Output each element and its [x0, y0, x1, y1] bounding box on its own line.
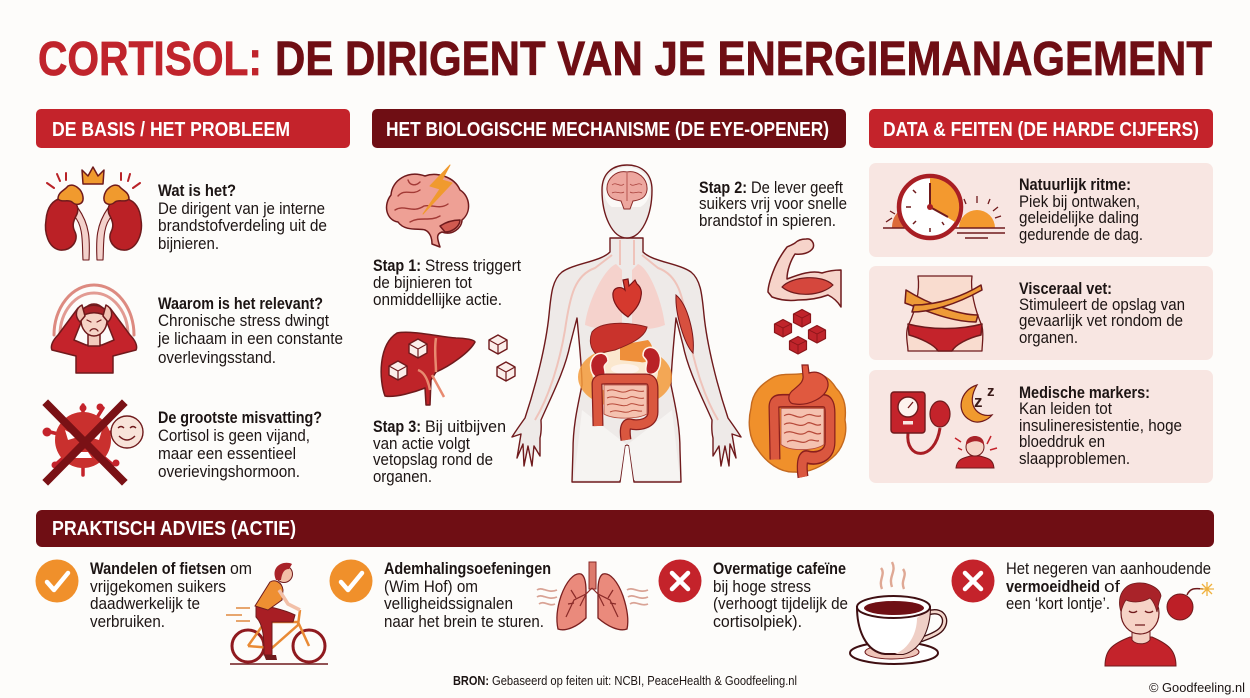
- icon: red cross: [658, 560, 702, 602]
- text: natuurlijk ritme: gedurende de dag.: [1019, 225, 1143, 244]
- icon: orange check: [330, 560, 372, 602]
- text: wandelen: Wandelen of fietsen: [90, 559, 226, 578]
- icon: tired person and bomb: [1105, 582, 1214, 666]
- text: waarom is het relevant: Chronische stress dwingt: [158, 311, 329, 330]
- icon: clock and sun: [883, 176, 1005, 238]
- text: medische markers: Medische markers:: [1019, 383, 1150, 402]
- text: ademhaling: [384, 559, 551, 631]
- advice: vermoeidheid negeren: [952, 559, 1214, 666]
- text: wat is het: bijnieren.: [158, 234, 219, 253]
- heading: de basis / het probleem: [36, 109, 350, 148]
- text: natuurlijk ritme: Natuurlijk ritme:: [1019, 175, 1131, 194]
- text: vermoeidheid: een ‘kort lontje’.: [1006, 594, 1110, 613]
- text: cafeine: cortisolpiek).: [713, 612, 802, 631]
- text: stap 3: vetopslag rond de: [373, 450, 493, 469]
- text: de grootste misvatting: [158, 408, 322, 481]
- heading: het biologische mechanisme: [372, 109, 846, 148]
- icon: waist with measuring tape: [905, 276, 983, 351]
- card: visceraal vet: [869, 266, 1213, 360]
- text: waarom is het relevant: overlevingsstand.: [158, 348, 276, 367]
- panel: de basis: [42, 167, 343, 481]
- text: de grootste misvatting: De grootste misvatting?: [158, 408, 322, 427]
- icon: flexed arm: [768, 239, 841, 307]
- card: medische markers: [869, 370, 1213, 483]
- text: stap 3: van actie volgt: [373, 434, 470, 453]
- text: vermoeidheid: [1006, 559, 1211, 613]
- icon: orange check: [36, 560, 78, 602]
- advice: ademhalingsoefeningen: [330, 559, 648, 631]
- text: wat is het: [158, 181, 327, 253]
- text: ademhaling: (Wim Hof) om: [384, 577, 478, 596]
- text: visceraal vet: [1019, 279, 1185, 347]
- icon: liver with sugar cubes: [381, 332, 515, 405]
- organ: heart: [613, 279, 641, 317]
- text: medische markers: Kan leiden tot: [1019, 399, 1112, 418]
- text: waarom is het relevant: je lichaam in een constante: [157, 329, 343, 348]
- text: stap 3: organen.: [373, 467, 432, 486]
- icon: brain with lightning: [387, 165, 469, 247]
- text: natuurlijk ritme: [1019, 175, 1143, 244]
- icon: stressed person: [51, 285, 137, 373]
- illustration: human body with organs: [512, 165, 741, 482]
- heading: data en feiten: DATA & FEITEN (DE HARDE CIJFERS): [883, 118, 1199, 141]
- text: wandelen: om: [230, 559, 252, 578]
- text: visceraal vet: gevaarlijk vet rondom de: [1019, 311, 1183, 330]
- text: de grootste misvatting: overievingshormoon.: [158, 462, 300, 481]
- text: stap 2: [699, 178, 847, 230]
- text: wat is het: Wat is het?: [158, 181, 236, 200]
- text: stap 2: brandstof in spieren.: [699, 211, 836, 230]
- text: medische markers: slaapproblemen.: [1019, 449, 1130, 468]
- text: visceraal vet: Visceraal vet:: [1019, 279, 1112, 298]
- organ: brain: [607, 172, 647, 209]
- text: stap 2: Stap 2:: [699, 178, 747, 197]
- advice: wandelen of fietsen: [36, 559, 328, 664]
- text: stap 1: de bijnieren tot: [373, 273, 472, 292]
- icon: visceral fat with gut: [749, 365, 846, 477]
- organ: intestines: [597, 379, 653, 440]
- text: natuurlijk ritme: Piek bij ontwaken,: [1019, 192, 1140, 211]
- text: wat is het: brandstofverdeling uit de: [158, 216, 327, 235]
- icon: kidneys with crown: [46, 167, 141, 260]
- text: vermoeidheid: Het negeren van aanhoudende: [1006, 559, 1211, 578]
- text: stap 1: Stress triggert: [425, 256, 521, 275]
- text: natuurlijk ritme: geleidelijke daling: [1019, 208, 1139, 227]
- text: de grootste misvatting: Cortisol is geen vijand,: [158, 426, 310, 445]
- heading: praktisch advies: [36, 510, 1214, 547]
- heading: het biologische mechanisme: HET BIOLOGISCHE MECHANISME (DE EYE-OPENER): [386, 118, 829, 141]
- organ: arm muscle: [676, 295, 693, 353]
- icon: cyclist: [226, 563, 328, 664]
- source line: Gebaseerd op feiten uit: NCBI, PeaceHealth & Goodfeeling.nl: [492, 674, 797, 688]
- text: cafeine: bij hoge stress: [713, 577, 811, 596]
- text: de grootste misvatting: maar een essentieel: [158, 444, 296, 463]
- icon: blood pressure, moon and headache: z: [974, 392, 982, 411]
- copyright: © Goodfeeling.nl: [1149, 680, 1245, 695]
- text: wat is het: De dirigent van je interne: [158, 199, 325, 218]
- text: ademhaling: velligheidssignalen: [384, 594, 513, 613]
- text: ademhaling: naar het brein te sturen.: [384, 612, 544, 631]
- organ: liver: [590, 323, 647, 354]
- text: stap 2: suikers vrij voor snelle: [699, 194, 847, 213]
- text: wandelen: vrijgekomen suikers: [90, 577, 226, 596]
- advice: overmatige cafeine: [658, 559, 945, 664]
- icon: blood pressure, moon and headache: z: [987, 383, 994, 400]
- icon: red sugar cubes: [774, 310, 826, 354]
- text: vermoeidheid: of: [1104, 577, 1120, 596]
- text: waarom is het relevant: Waarom is het relevant?: [158, 294, 323, 313]
- text: medische markers: bloeddruk en: [1019, 432, 1105, 451]
- organ: kidneys: [590, 353, 608, 379]
- text: stap 1: onmiddellijke actie.: [373, 290, 502, 309]
- text: wandelen: [90, 559, 252, 631]
- text: cafeine: [713, 559, 848, 631]
- text: medische markers: insulineresistentie, hoge: [1019, 416, 1182, 435]
- text: cafeine: (verhoogt tijdelijk de: [713, 594, 848, 613]
- text: cafeine: Overmatige cafeïne: [713, 559, 846, 578]
- text: waarom is het relevant: [157, 294, 343, 367]
- text: wandelen: verbruiken.: [90, 612, 165, 631]
- text: stap 1: [373, 256, 521, 309]
- text: wandelen: daadwerkelijk te: [90, 594, 200, 613]
- icon: blood pressure, moon and headache: [891, 383, 997, 468]
- icon: red cross: [952, 560, 994, 602]
- icon: lungs: [537, 562, 648, 630]
- heading: data en feiten: [869, 109, 1213, 148]
- text: stap 1: Stap 1:: [373, 256, 421, 275]
- heading: praktisch advies: PRAKTISCH ADVIES (ACTIE): [52, 517, 296, 540]
- text: visceraal vet: Stimuleert de opslag van: [1019, 295, 1185, 314]
- text: stap 2: De lever geeft: [751, 178, 843, 197]
- text: vermoeidheid: vermoeidheid: [1006, 577, 1100, 596]
- text: visceraal vet: organen.: [1019, 328, 1078, 347]
- vessels: [535, 240, 718, 420]
- panel: biologisch mechanisme: [373, 165, 847, 486]
- icon: coffee cup: [850, 562, 945, 664]
- card: natuurlijk ritme: [869, 163, 1213, 257]
- panel: data en feiten: [869, 163, 1213, 483]
- title: CORTISOL:: [38, 33, 262, 86]
- text: stap 3: Bij uitbijven: [425, 417, 506, 436]
- text: medische markers: [1019, 383, 1182, 468]
- icon: crossed virus and smiley: [42, 404, 143, 480]
- heading: de basis / het probleem: DE BASIS / HET PROBLEEM: [52, 118, 290, 141]
- text: stap 3: Stap 3:: [373, 417, 421, 436]
- source line: BRON:: [453, 674, 489, 688]
- organ: lungs: [585, 264, 665, 329]
- text: ademhaling: Ademhalingsoefeningen: [384, 559, 551, 578]
- text: stap 3: [373, 417, 506, 486]
- organ: fat glow: [578, 346, 672, 408]
